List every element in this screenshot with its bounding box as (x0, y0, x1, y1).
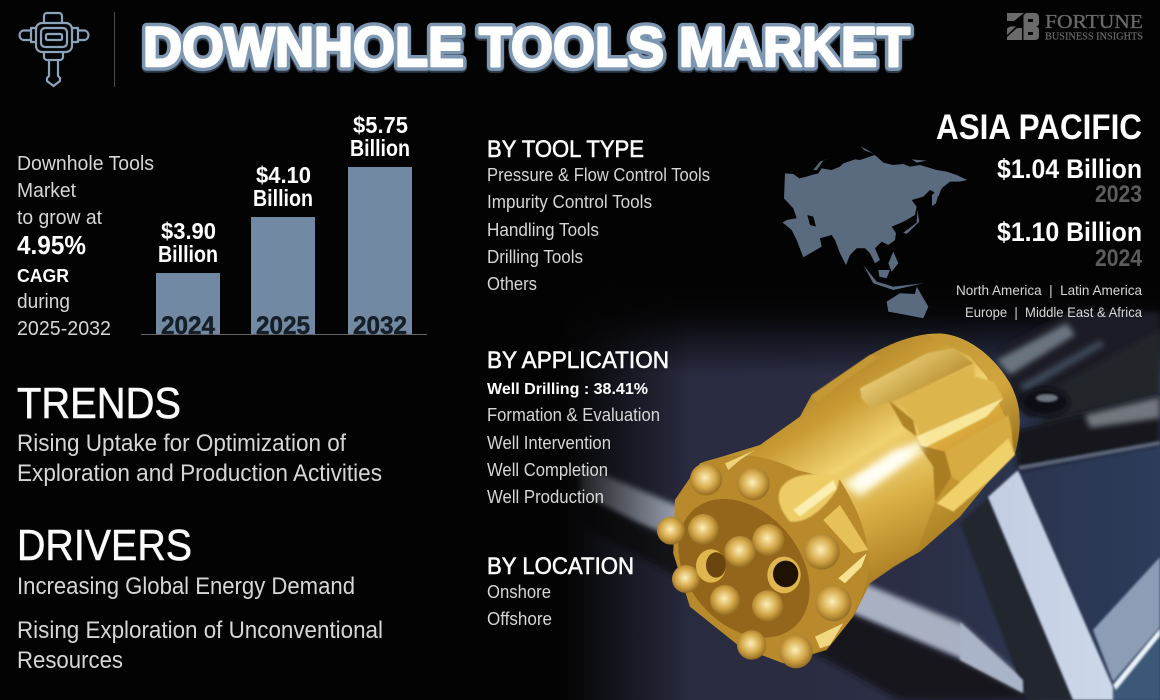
regional stats: $1.10 Billion (997, 217, 1142, 247)
CAGR text block: during (17, 291, 70, 313)
drivers: Rising Exploration of Unconventional (17, 617, 383, 644)
drivers: DRIVERS (17, 521, 192, 570)
bar chart: $3.90 (161, 218, 216, 244)
by tool type (487, 136, 710, 294)
CAGR text block: Market (17, 180, 76, 202)
by application: Well Drilling : 38.41% (487, 381, 648, 398)
bar chart (141, 112, 427, 340)
by tool type: Impurity Control Tools (487, 192, 652, 212)
cylinder section (840, 450, 947, 580)
bar chart: Billion (253, 185, 313, 211)
regional stats (936, 108, 1143, 320)
end cap (927, 334, 1020, 453)
by application: BY APPLICATION (487, 347, 669, 374)
CAGR text block: to grow at (17, 207, 102, 229)
regional stats: 2023 (1095, 181, 1142, 208)
bar chart: Billion (350, 135, 410, 161)
trends: TRENDS (17, 379, 181, 428)
logo: Fortune Business Insights (1007, 11, 1143, 42)
trends: Rising Uptake for Optimization of (17, 430, 346, 457)
by application: Well Production (487, 487, 604, 507)
by application: Well Intervention (487, 433, 611, 453)
bar chart: $4.10 (256, 162, 311, 188)
by application: Well Completion (487, 460, 608, 480)
header divider (114, 12, 115, 87)
regional stats: Europe | Middle East & Africa (965, 304, 1142, 320)
bit body (673, 333, 1020, 663)
bar chart: 2032 (353, 312, 407, 340)
background photo: metal frame (515, 280, 1160, 700)
regional stats: North America | Latin America (956, 282, 1142, 298)
icon: downhole tool (20, 13, 88, 86)
flushing holes (696, 549, 801, 593)
bar chart: $5.75 (353, 112, 408, 138)
bar chart: 2025 (256, 312, 310, 340)
highlight (843, 440, 923, 497)
trends (17, 379, 382, 487)
by tool type: Drilling Tools (487, 247, 583, 267)
CAGR text block: Downhole Tools (17, 153, 154, 175)
drivers (17, 521, 383, 674)
trends: Exploration and Production Activities (17, 460, 382, 487)
bit face (651, 473, 837, 664)
CAGR text block: 2025-2032 (17, 318, 111, 340)
title: DOWNHOLE TOOLS MARKET (143, 15, 910, 78)
logo: Fortune Business Insights: BUSINESS INSIGHTS (1045, 32, 1143, 42)
by location: Offshore (487, 609, 552, 629)
by tool type: Pressure & Flow Control Tools (487, 165, 710, 185)
logo: Fortune Business Insights: FORTUNE (1045, 11, 1143, 33)
front collar (673, 455, 868, 663)
CAGR text block (17, 153, 154, 340)
regional stats: 2024 (1095, 245, 1143, 272)
CAGR text block: 4.95% (17, 230, 86, 260)
flute near face (779, 474, 840, 522)
drivers: Resources (17, 647, 123, 674)
by tool type: Others (487, 274, 537, 294)
bar chart: Billion (158, 241, 218, 267)
drill bit image (651, 333, 1020, 668)
title: DOWNHOLE TOOLS MARKET (143, 15, 910, 78)
splines (812, 348, 1015, 512)
title: DOWNHOLE TOOLS MARKET (143, 16, 910, 80)
carbide buttons (657, 463, 851, 668)
map: Asia Pacific (783, 146, 967, 318)
by application: Formation & Evaluation (487, 405, 660, 425)
by application (487, 347, 669, 507)
regional stats: $1.04 Billion (997, 154, 1142, 184)
drivers: Increasing Global Energy Demand (17, 573, 355, 600)
regional stats: ASIA PACIFIC (936, 108, 1142, 147)
bar chart: 2024 (161, 312, 215, 340)
CAGR text block: CAGR (17, 266, 69, 286)
by tool type: Handling Tools (487, 220, 599, 240)
by location (487, 553, 634, 629)
by tool type: BY TOOL TYPE (487, 136, 644, 163)
by location: BY LOCATION (487, 553, 634, 580)
by location: Onshore (487, 582, 551, 602)
